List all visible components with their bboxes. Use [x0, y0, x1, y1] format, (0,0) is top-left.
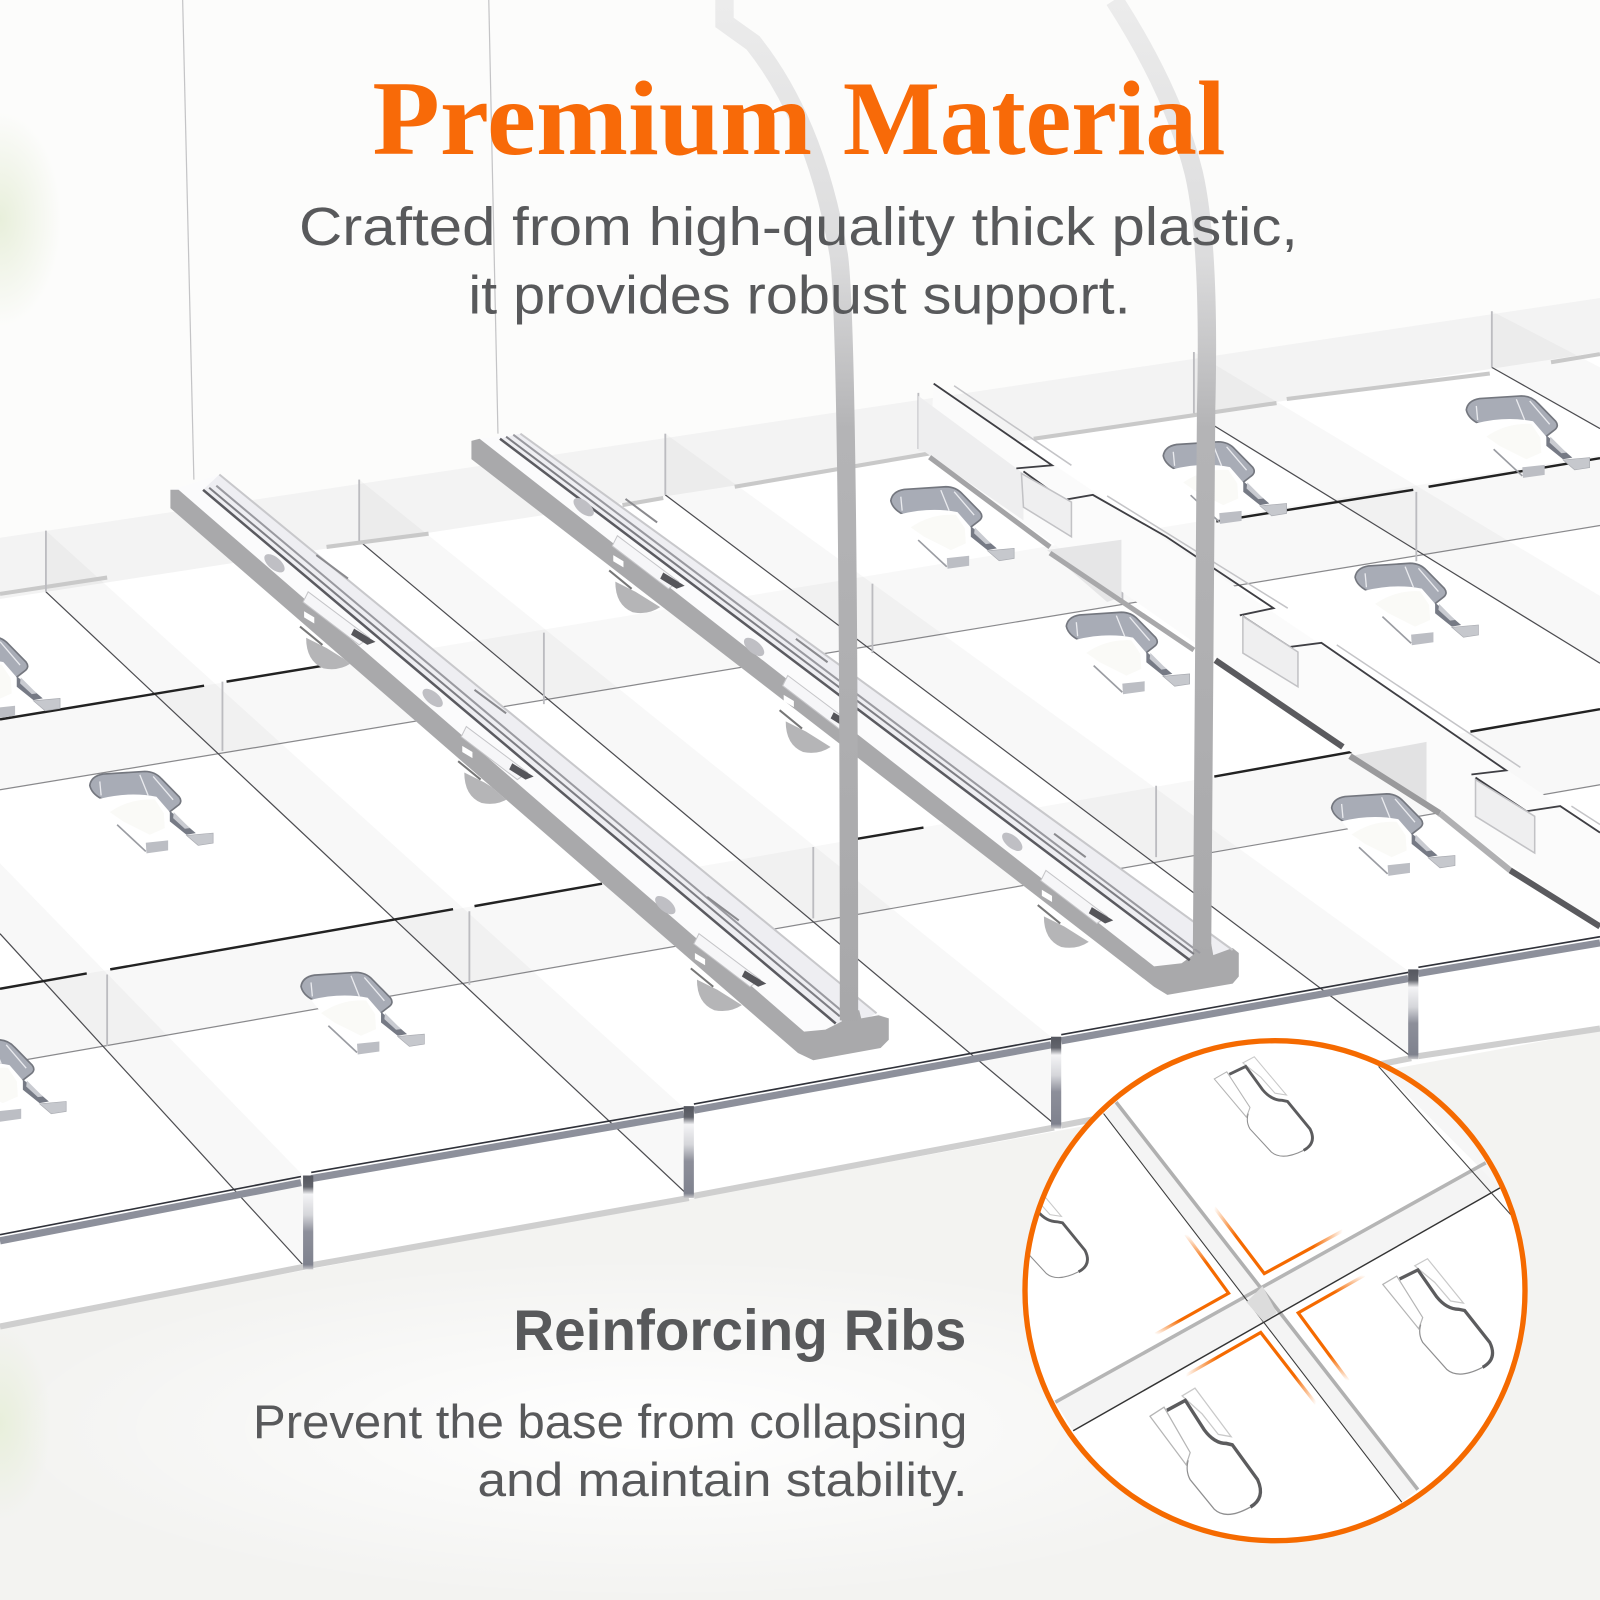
rib walls long direction [0, 311, 1600, 1268]
grid lines [0, 367, 1600, 1268]
bracket blocks [1021, 473, 1535, 853]
front edge of shelf [0, 937, 1600, 1327]
stepped rail without divider [918, 384, 1600, 927]
callout text: reinforcing ribs: and maintain stability. [478, 1454, 967, 1506]
divider rail B [471, 434, 1239, 995]
rib bands [1055, 1059, 1536, 1502]
slots in magnifier [989, 1057, 1493, 1514]
divider rail A [170, 474, 889, 1060]
title: Premium [372, 59, 812, 177]
keyhole slots [0, 396, 1590, 1122]
title: Material [843, 59, 1226, 177]
callout text: reinforcing ribs [253, 1299, 967, 1506]
shelf base [0, 298, 1600, 1327]
callout text: reinforcing ribs: Prevent the base from collapsing [253, 1396, 967, 1448]
orange corner brackets [1155, 1208, 1364, 1404]
posts on cross ribs [46, 311, 1492, 1046]
back grey line [0, 354, 1600, 594]
rib walls cross direction [0, 455, 1600, 1064]
divider panel A edge [183, 0, 849, 1020]
magnifier circle: rib detail [989, 1041, 1536, 1541]
dark rib edges [0, 458, 1600, 989]
divider panel B edge [489, 0, 1207, 949]
dark shadow line [930, 457, 1600, 927]
callout text: reinforcing ribs: Reinforcing Ribs [513, 1299, 966, 1363]
subtitle [299, 197, 1298, 325]
subtitle: Crafted from high-quality thick plastic, [299, 197, 1298, 257]
subtitle: it provides robust support. [468, 265, 1131, 325]
title [372, 59, 1226, 177]
